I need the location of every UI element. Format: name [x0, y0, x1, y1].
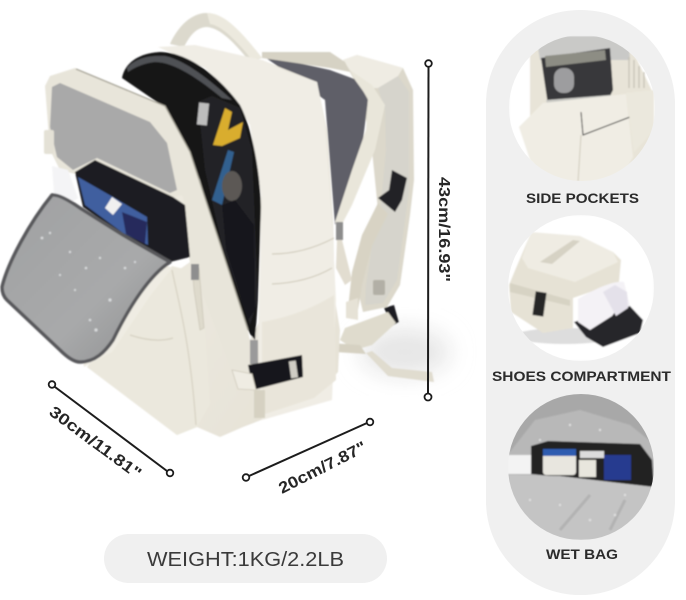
strap adjuster buckle	[346, 170, 407, 326]
magazine in main compartment	[197, 96, 258, 325]
main body: lower part	[87, 60, 340, 437]
wet bag flap with water drops	[2, 195, 172, 367]
front buckle	[232, 355, 303, 418]
feature: wet bag photo	[508, 392, 655, 540]
compartment top rim	[262, 52, 350, 72]
panel: feature pill background	[486, 10, 675, 595]
front lower body shading	[87, 266, 210, 435]
shoulder strap with mesh padding	[343, 55, 414, 312]
floor shadow	[360, 328, 450, 376]
compartment zip edge	[335, 70, 385, 228]
dimension: depth label: 20cm/7.87"	[276, 439, 369, 498]
feature: shoes compartment photo	[508, 215, 654, 361]
dimension: height line	[424, 60, 432, 400]
label: wet bag: WET BAG	[546, 547, 618, 562]
black pouch with toiletries	[52, 160, 190, 262]
label: shoes compartment: SHOES COMPARTMENT	[492, 369, 672, 384]
grey back compartment	[262, 55, 368, 225]
dimension: width label: 30cm/11.81"	[46, 404, 144, 483]
lower strap webbing	[296, 312, 434, 382]
weight pill	[104, 534, 387, 583]
top handle	[170, 13, 262, 62]
weight pill: WEIGHT:1KG/2.2LB	[147, 549, 344, 571]
dimension: depth line	[243, 419, 373, 481]
label: side pockets: SIDE POCKETS	[526, 191, 639, 206]
upper front flap	[44, 68, 254, 384]
main compartment opening	[122, 52, 261, 340]
feature: side pockets photo	[509, 35, 655, 182]
interior top fabric	[127, 56, 232, 100]
dimension: height label: 43cm/16.93"	[435, 177, 452, 282]
top band of body	[158, 45, 336, 420]
zipper pulls	[191, 222, 352, 364]
dimension: width line	[49, 381, 173, 476]
body pocket seam	[272, 238, 334, 284]
front seam shading	[262, 295, 336, 415]
backpack illustration	[2, 13, 450, 437]
